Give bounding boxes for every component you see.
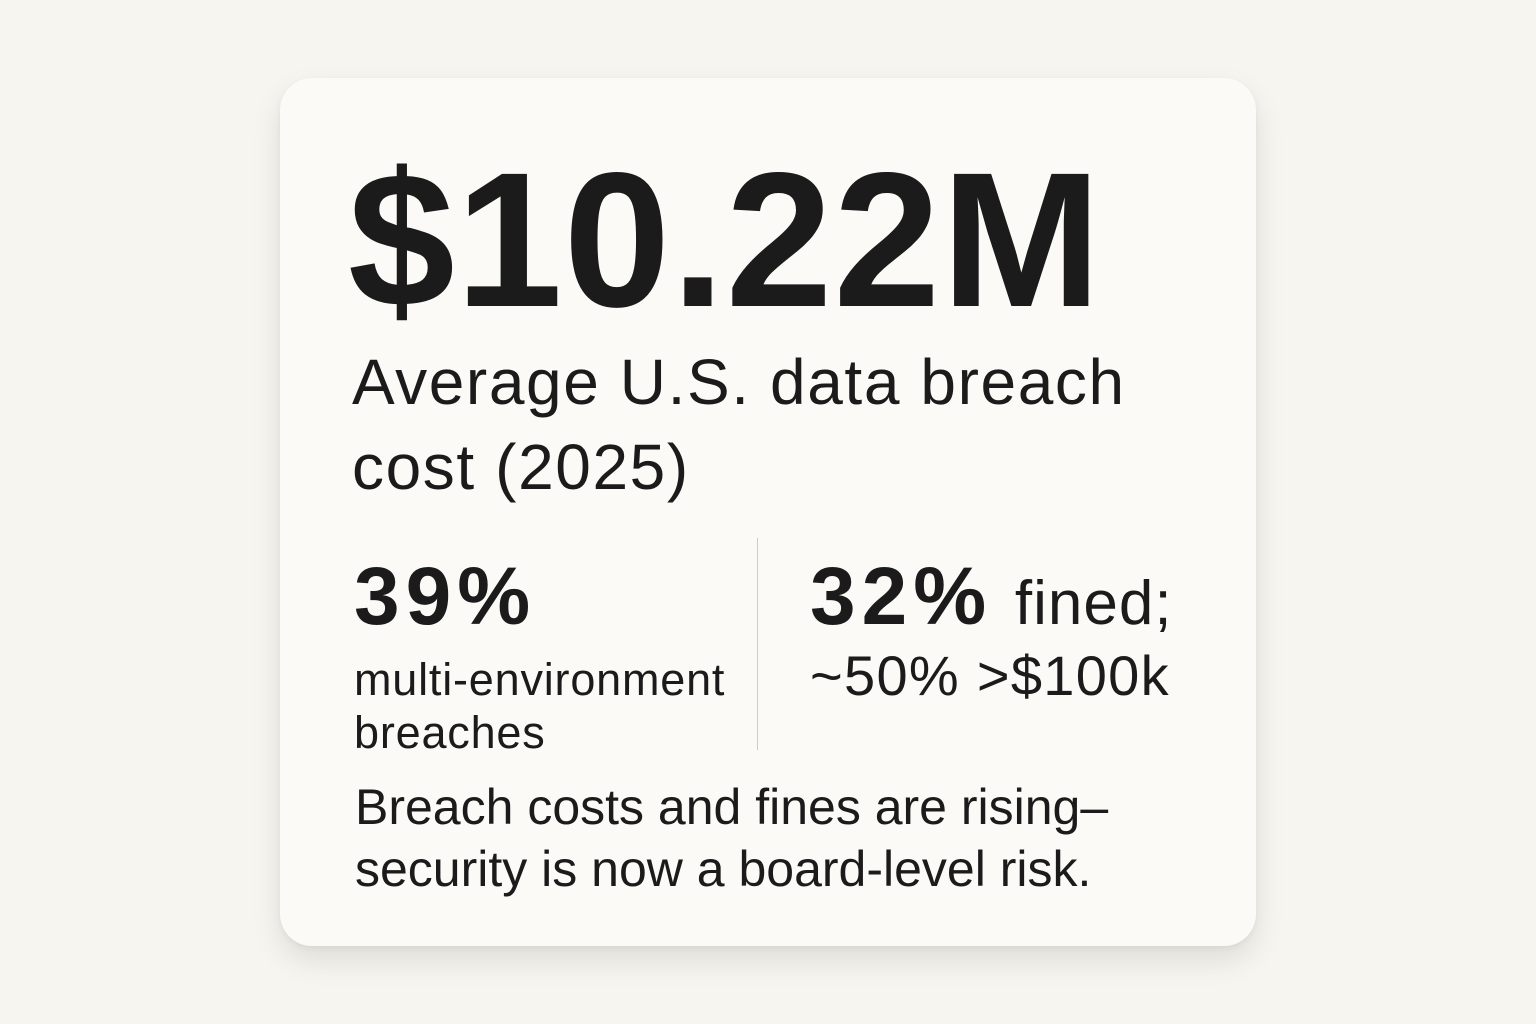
stat: 32% fined: 32% fined; xyxy=(810,551,1173,642)
headline number: $10.22M xyxy=(348,132,1102,347)
subtitle text xyxy=(352,346,1126,503)
subtitle text: cost (2025) xyxy=(352,431,690,503)
stat: 39% multi-environment xyxy=(354,551,725,758)
card: breach cost panel xyxy=(280,78,1256,946)
footer message xyxy=(355,779,1108,897)
stat: 39% multi-environment: breaches xyxy=(354,707,546,758)
stat: 39% multi-environment: 39% xyxy=(354,551,536,642)
footer message: security is now a board-level risk. xyxy=(355,841,1091,897)
stat: 32% fined xyxy=(810,551,1173,707)
divider xyxy=(757,538,758,750)
stat: 32% fined: ~50% >$100k xyxy=(810,644,1170,707)
subtitle text: Average U.S. data breach xyxy=(352,346,1126,418)
stat: 39% multi-environment: multi-environment xyxy=(354,654,725,705)
footer message: Breach costs and fines are rising– xyxy=(355,779,1108,835)
